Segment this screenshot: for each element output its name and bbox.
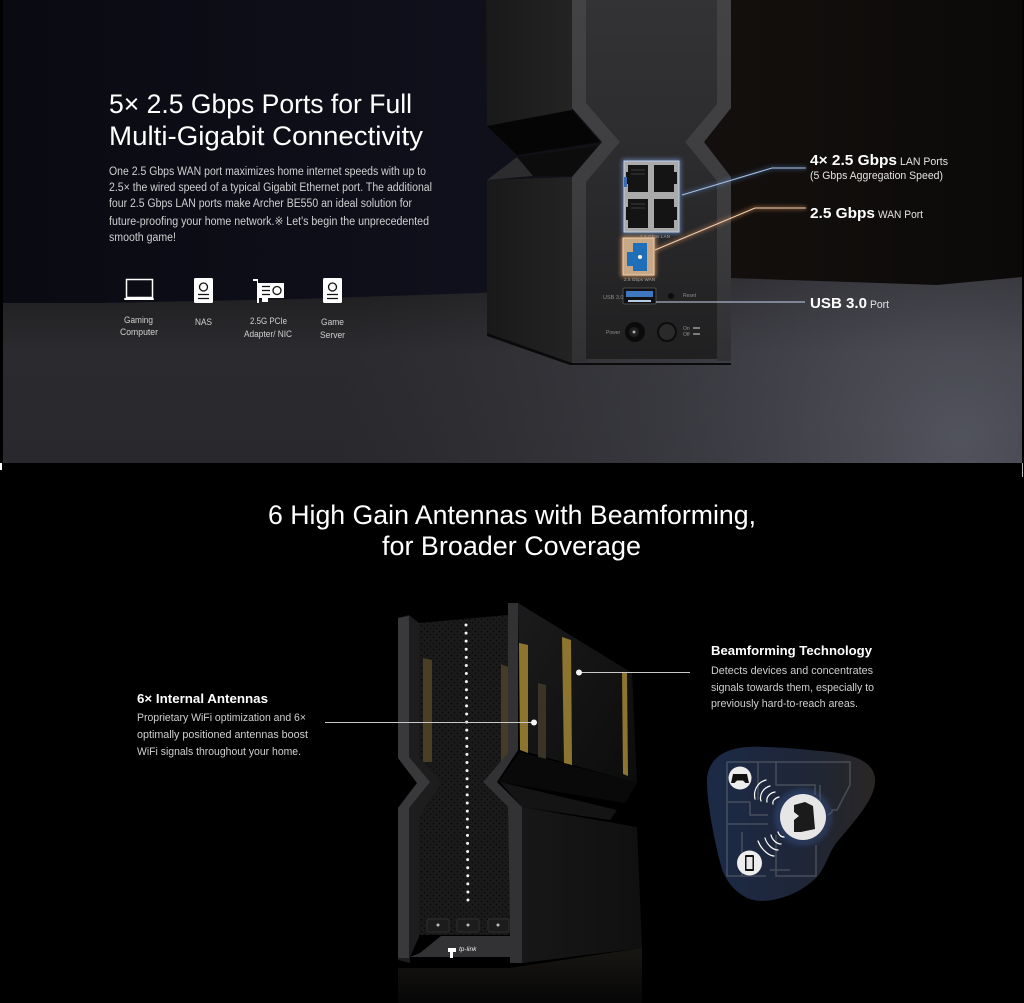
tp-link logo xyxy=(448,946,477,958)
panel: router rear view: On xyxy=(683,326,690,332)
text block: ports description xyxy=(109,166,432,244)
panel: router rear view: Power xyxy=(606,330,621,336)
text block: internal antennas: 6× Internal Antennas xyxy=(137,691,268,706)
icon: gaming computer xyxy=(124,280,154,300)
decorative frame marks xyxy=(0,463,1023,477)
game controller badge xyxy=(728,766,752,790)
label: USB port: USB 3.0 xyxy=(810,295,867,312)
callout line: internal antennas xyxy=(325,720,537,726)
router side upper translucent shell xyxy=(518,603,637,783)
phone badge xyxy=(737,850,762,876)
router waist shadow xyxy=(487,110,600,155)
router left strip xyxy=(572,0,620,362)
icon label: PCIe adapter xyxy=(244,316,292,340)
tp-link logo: tp-link xyxy=(459,946,477,953)
icon: PCIe adapter xyxy=(253,279,284,303)
router left strip dark side xyxy=(398,615,442,963)
title: antennas: for Broader Coverage xyxy=(382,531,641,561)
text block: beamforming: Detects devices and concentrates xyxy=(711,665,873,677)
router badge xyxy=(774,788,832,846)
floor plan walls xyxy=(727,762,850,876)
antenna strips on side xyxy=(519,637,628,776)
router waist facet xyxy=(487,157,533,180)
floor plan blob xyxy=(707,747,875,901)
title: ports: 5× 2.5 Gbps Ports for Full xyxy=(109,89,412,119)
label: LAN ports: (5 Gbps Aggregation Speed) xyxy=(810,170,943,182)
connector: WAN line xyxy=(655,208,806,250)
text block: ports description: One 2.5 Gbps WAN port maximizes home internet speeds with up to xyxy=(109,166,426,178)
icon label: game server xyxy=(320,317,345,341)
text block: ports description: future-proofing your home network.※ Let's begin the unprecedented xyxy=(109,216,429,228)
icon label: PCIe adapter: Adapter/ NIC xyxy=(244,329,292,340)
text block: internal antennas xyxy=(137,691,308,758)
signal arcs: upper xyxy=(755,780,779,804)
icon label: gaming computer xyxy=(120,315,158,338)
panel: router rear view: Reset xyxy=(683,293,697,299)
label: USB port: Port xyxy=(870,299,889,311)
text block: ports description: smooth game! xyxy=(109,232,176,244)
power button xyxy=(657,322,677,342)
text block: ports description: four 2.5 Gbps LAN ports make Archer BE550 an ideal solution for xyxy=(109,198,412,210)
icon: game server xyxy=(323,278,342,303)
router lower left body xyxy=(487,177,572,363)
text block: ports description: 2.5× the wired speed of a typical Gigabit Ethernet port. The additional xyxy=(109,182,432,194)
title: antennas xyxy=(268,500,756,561)
panel: router rear view: USB 3.0 xyxy=(603,295,623,301)
label: WAN port xyxy=(810,205,923,222)
panel: ports section background xyxy=(3,0,1022,463)
router right strip xyxy=(685,0,731,361)
label: WAN port: WAN Port xyxy=(878,209,923,221)
port labels: 2.5 Gbps LAN xyxy=(640,234,670,239)
control buttons xyxy=(427,919,509,932)
connector: LAN line xyxy=(682,168,806,195)
router center strip xyxy=(483,603,522,963)
connector: USB line xyxy=(656,300,805,304)
diagram: beamforming floor plan xyxy=(707,747,875,901)
router left strip highlight xyxy=(398,616,430,958)
USB port xyxy=(623,288,656,304)
icon label: NAS: NAS xyxy=(195,317,212,328)
logo plate xyxy=(410,936,510,957)
text block: beamforming: previously hard-to-reach areas. xyxy=(711,698,858,710)
label: WAN port: 2.5 Gbps xyxy=(810,205,875,222)
dim front antennas xyxy=(423,658,432,762)
signal arcs: lower xyxy=(758,832,784,856)
icon label: gaming computer: Gaming xyxy=(124,315,153,326)
WAN port xyxy=(621,236,656,277)
text block: internal antennas: WiFi signals throughout your home. xyxy=(137,746,301,758)
LAN ports xyxy=(622,159,681,234)
text block: beamforming: signals towards them, especially to xyxy=(711,682,874,694)
router lower side xyxy=(522,807,642,963)
label: LAN ports: 4× 2.5 Gbps xyxy=(810,152,897,169)
panel: router rear view xyxy=(486,0,731,365)
text block: internal antennas: optimally positioned antennas boost xyxy=(137,729,308,741)
title: ports: Multi-Gigabit Connectivity xyxy=(109,121,423,151)
router reflection xyxy=(398,948,642,1003)
router center panel xyxy=(586,0,717,359)
router foot shadow xyxy=(487,333,731,365)
icon label: game server: Game xyxy=(321,317,344,328)
router front mesh panel xyxy=(419,615,510,935)
panel: router with internal antennas xyxy=(398,603,642,1003)
title: antennas: 6 High Gain Antennas with Beamforming, xyxy=(268,500,756,530)
panel: router rear view: 2.5 Gbps WAN xyxy=(624,277,655,282)
icon label: PCIe adapter: 2.5G PCIe xyxy=(250,316,287,327)
text block: internal antennas: Proprietary WiFi optimization and 6× xyxy=(137,712,306,724)
label: LAN ports xyxy=(810,152,948,182)
icon label: gaming computer: Computer xyxy=(120,327,158,338)
icon label: game server: Server xyxy=(320,330,345,341)
callout line: beamforming xyxy=(576,670,690,676)
panel: router rear view: Off xyxy=(683,332,690,338)
icon: NAS xyxy=(194,278,213,303)
title: ports xyxy=(109,89,423,151)
router upper left body xyxy=(486,0,572,126)
router waist wedge xyxy=(498,752,637,803)
text block: beamforming xyxy=(711,643,874,710)
text block: beamforming: Beamforming Technology xyxy=(711,643,873,658)
LED dot column xyxy=(466,625,468,908)
power socket xyxy=(625,322,645,342)
label: LAN ports: LAN Ports xyxy=(900,156,948,168)
